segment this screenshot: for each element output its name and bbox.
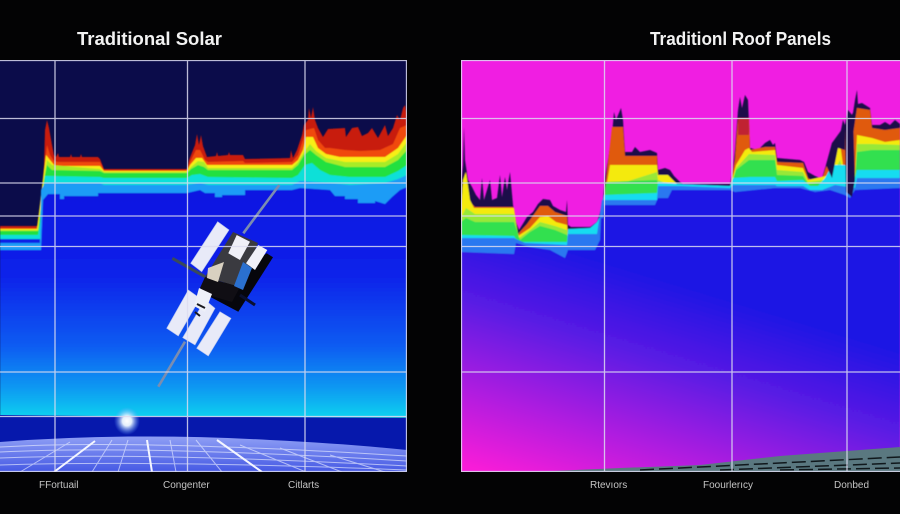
spectrum bands: right (461, 90, 900, 472)
rooftop silhouette (530, 447, 900, 472)
axis labels: left: Congenter (163, 480, 210, 491)
panel: traditional solar spectrum chart (0, 60, 407, 472)
satellite (158, 185, 279, 387)
axis labels: right (590, 480, 869, 491)
title: right panel: Traditionl Roof Panels (650, 28, 831, 49)
axis labels: left (39, 480, 319, 491)
grid lines: left (0, 60, 407, 472)
solar panel field (0, 436, 407, 472)
sun glow (114, 407, 140, 435)
grid lines: right (461, 60, 900, 472)
axis labels: right: Foourlerıcy (703, 480, 753, 491)
title: left panel: Traditional Solar (77, 28, 222, 49)
rooftop shadows (640, 457, 900, 470)
axis labels: right: Rtevıors (590, 480, 627, 491)
axis labels: left: Citlarts (288, 480, 319, 491)
spectrum bands: left (0, 105, 407, 418)
panel: traditional roof panels spectrum chart (461, 60, 900, 472)
axis labels: left: FFortuail (39, 480, 78, 491)
horizon band (0, 415, 407, 450)
axis labels: right: Donbed (834, 480, 869, 491)
